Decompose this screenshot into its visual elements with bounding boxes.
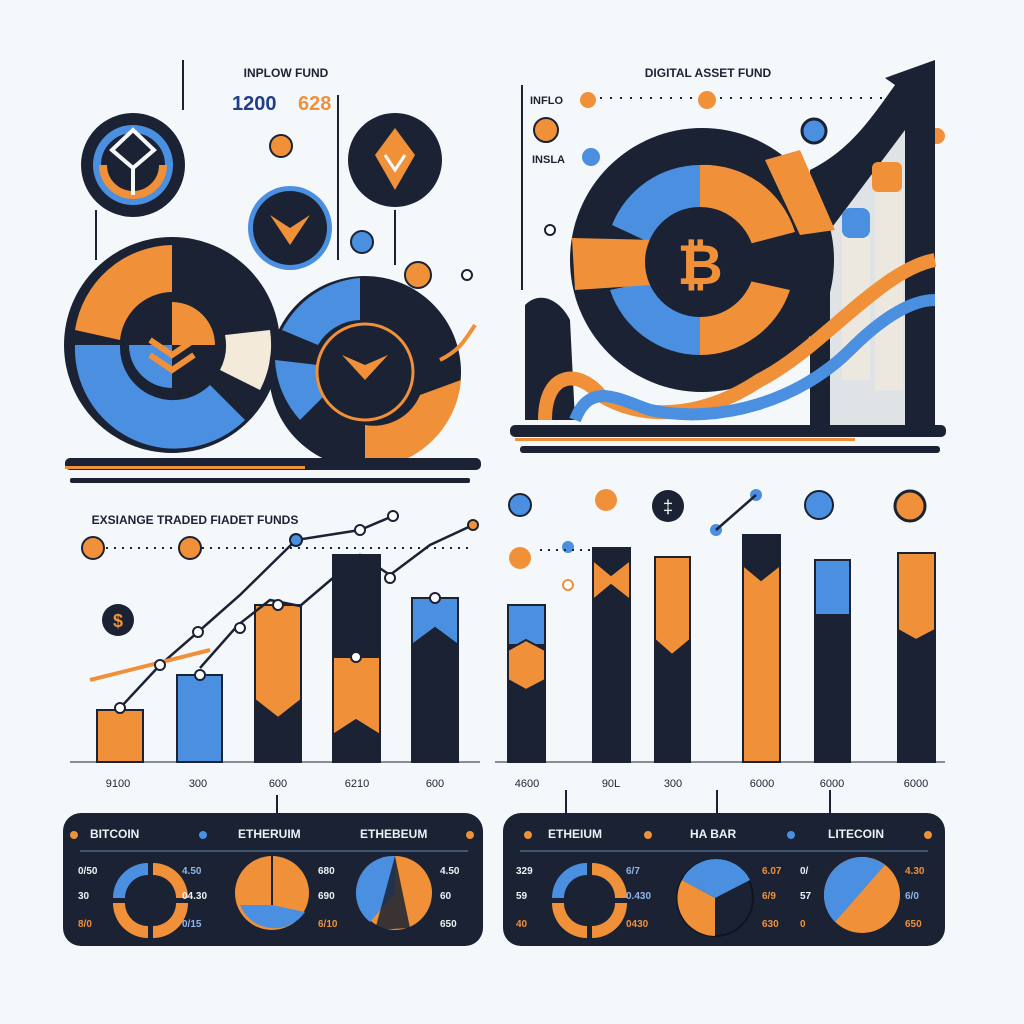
axis labels: 600 [426,778,444,790]
title: EXSIANGE TRADED FIADET FUNDS [92,513,298,527]
baseline [510,425,946,453]
legend values: 57 [800,891,812,902]
bars [508,535,935,762]
legend values: 329 [516,866,533,877]
legend values [516,866,925,930]
axis labels [515,778,928,790]
legend values: 650 [905,919,922,930]
legend values: 40 [516,919,528,930]
legend values: 650 [440,919,457,930]
labels [530,95,565,166]
title: inflow fund: INPLOW FUND [244,66,329,80]
baseline [65,458,481,483]
axis labels: 90L [602,778,620,790]
legend values: 59 [516,891,528,902]
pie ethereum [235,856,309,930]
labels: INFLO [530,95,563,107]
legend headings: BITCOIN [90,827,139,841]
big bitcoin donut [570,128,835,392]
labels: INSLA [532,154,565,166]
legend values: 30 [78,891,90,902]
axis labels: 600 [269,778,287,790]
legend headings [90,827,427,841]
panel: exchange traded funds bar chart [70,511,480,790]
legend values: 6/10 [318,919,338,930]
legend values: 0/50 [78,866,98,877]
axis labels [106,778,444,790]
legend values: 4.50 [182,866,202,877]
panel: exchange traded funds bar chart: $ [113,611,123,631]
axis labels: 300 [189,778,207,790]
coins [270,135,472,288]
legend values: 0.430 [626,891,651,902]
icon: circle 2 [348,113,442,207]
legend values: 6/7 [626,866,640,877]
legend values: 6/9 [762,891,776,902]
axis labels: 9100 [106,778,130,790]
panel: digital asset fund [510,60,946,453]
legend values: 8/0 [78,919,92,930]
axis labels: 6210 [345,778,369,790]
axis labels: 4600 [515,778,539,790]
axis labels: 6000 [820,778,844,790]
panel: legend right [503,813,945,946]
icon: circle 1 [81,113,185,217]
panel: right bar chart: ‡ [663,497,673,517]
legend headings: HA BAR [690,827,737,841]
connector lines [277,790,830,815]
legend headings [548,827,884,841]
big bitcoin donut: ₿ [677,233,723,296]
rising arrow background [810,60,935,425]
legend values: 0/ [800,866,809,877]
legend values: 0430 [626,919,649,930]
numbers: 628 [298,93,331,115]
axis labels: 6000 [904,778,928,790]
donut chart right [269,276,475,468]
legend values: 0 [800,919,806,930]
legend headings: ETHERUIM [238,827,301,841]
numbers: 1200 [232,93,276,115]
legend values: 6.07 [762,866,782,877]
legend headings: LITECOIN [828,827,884,841]
waves [525,298,575,420]
axis labels: 6000 [750,778,774,790]
pie ha bar [677,859,753,936]
line chart [90,516,473,708]
panel: legend left [63,813,483,946]
legend values: 690 [318,891,335,902]
legend values: 0/15 [182,919,202,930]
icon: circle 3 [248,186,332,270]
legend values: 630 [762,919,779,930]
title: digital asset fund: DIGITAL ASSET FUND [645,66,772,80]
legend values: 6/0 [905,891,919,902]
legend values: 4.50 [440,866,460,877]
pie litecoin [824,857,900,933]
donut ethereum [552,863,627,938]
legend headings: ETHEIUM [548,827,602,841]
legend values: 04.30 [182,891,207,902]
legend values: 680 [318,866,335,877]
numbers [232,93,331,115]
legend values [78,866,460,930]
axis labels: 300 [664,778,682,790]
legend values: 4.30 [905,866,925,877]
panel: right bar chart [495,489,945,790]
legend values: 60 [440,891,452,902]
bars [97,555,458,762]
donut bitcoin [113,863,188,938]
donut chart left [64,237,280,453]
legend headings: ETHEBEUM [360,827,427,841]
panel: inflow fund [64,60,481,483]
pie ethebeum [356,856,432,930]
